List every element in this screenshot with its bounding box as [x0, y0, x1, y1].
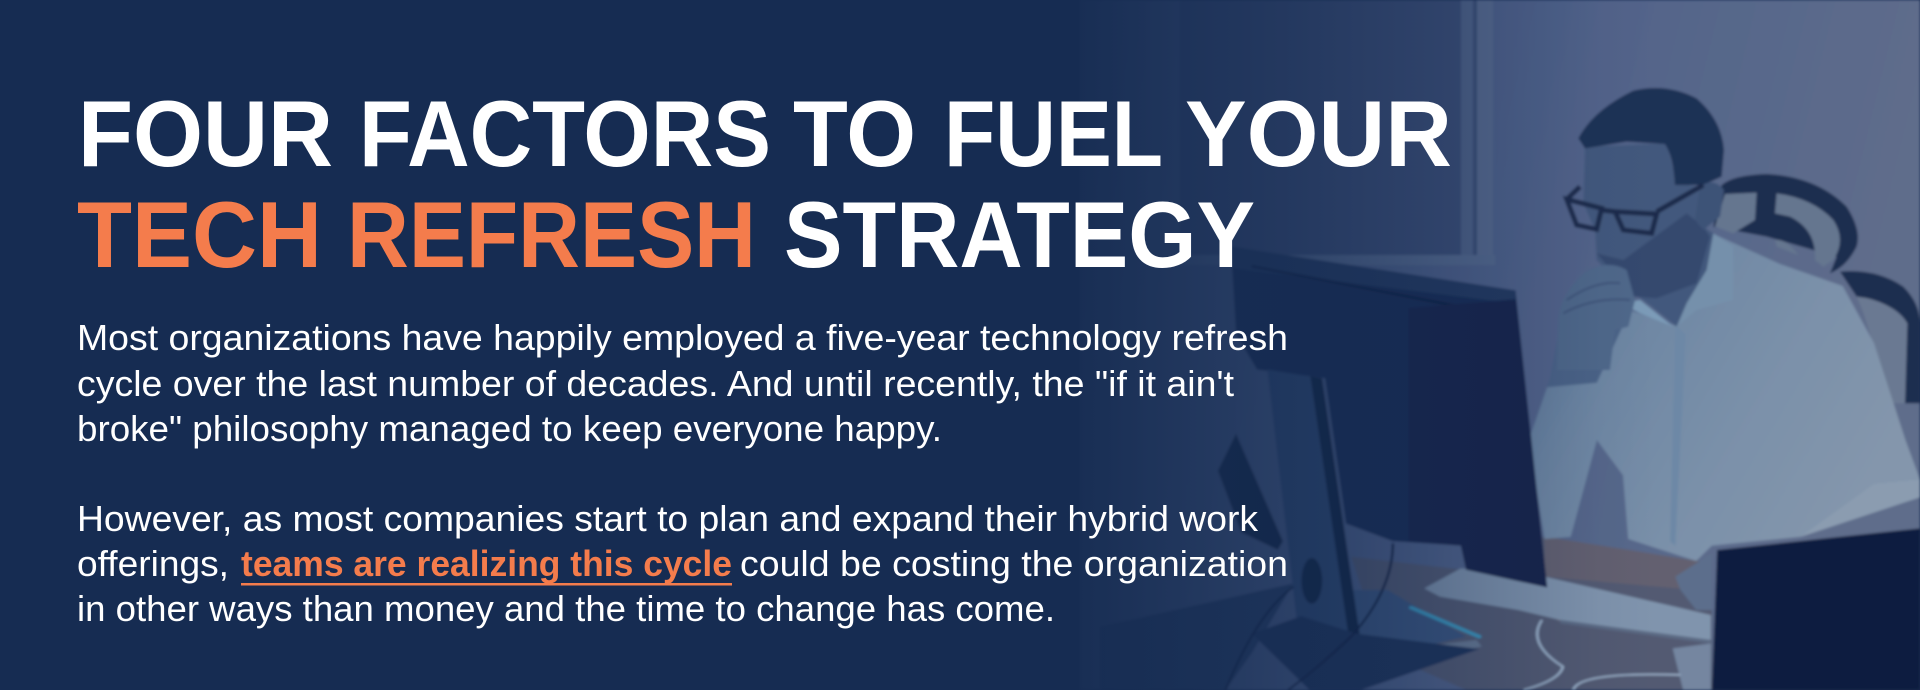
notepad — [1346, 590, 1466, 653]
monitor back — [1218, 246, 1547, 690]
title: REFRESH — [347, 182, 756, 287]
glasses — [1567, 185, 1703, 233]
office chair — [1713, 174, 1920, 403]
monitor stand — [1267, 370, 1356, 638]
title: FUEL — [944, 81, 1163, 186]
title: FOUR — [78, 81, 333, 186]
shirt — [1529, 233, 1920, 561]
title: TECH — [77, 182, 322, 287]
sleeve crease — [1801, 480, 1920, 537]
title: TO — [793, 81, 916, 186]
wood wedge — [1511, 587, 1560, 622]
shirt fold — [1670, 326, 1686, 546]
keyboard and front laptop — [1346, 528, 1920, 690]
photo: man working at a computer — [1080, 0, 1920, 690]
title: FACTORS — [359, 81, 771, 186]
second paragraph: in other ways than money and the time to change has come. — [77, 588, 1055, 629]
title: YOUR — [1185, 81, 1452, 186]
second paragraph: However, as most companies start to plan and expand their hybrid work — [77, 498, 1259, 539]
white cable — [1524, 620, 1681, 690]
intro paragraph: broke" philosophy managed to keep everyone happy. — [77, 408, 942, 449]
wall — [1080, 0, 1920, 690]
intro paragraph: Most organizations have happily employed a five-year technology refresh — [77, 317, 1288, 358]
second paragraph: could be costing the organization — [740, 543, 1288, 584]
title — [77, 81, 1452, 287]
highlighted link text: teams are realizing this cycle — [241, 543, 732, 584]
cables — [1226, 543, 1393, 690]
second paragraph: offerings, — [77, 543, 229, 584]
desk — [1100, 537, 1712, 690]
window frame — [1180, 0, 1495, 265]
navy fade overlay — [1040, 0, 1920, 690]
face and hand — [1557, 88, 1733, 370]
title: STRATEGY — [784, 182, 1255, 287]
stand base — [1252, 616, 1479, 690]
forearm — [1547, 326, 1623, 387]
second paragraph — [77, 498, 1288, 629]
collar — [1677, 233, 1733, 327]
intro paragraph: cycle over the last number of decades. And until recently, the "if it ain't — [77, 363, 1234, 404]
intro paragraph — [77, 317, 1288, 449]
left desk item — [1218, 433, 1283, 550]
